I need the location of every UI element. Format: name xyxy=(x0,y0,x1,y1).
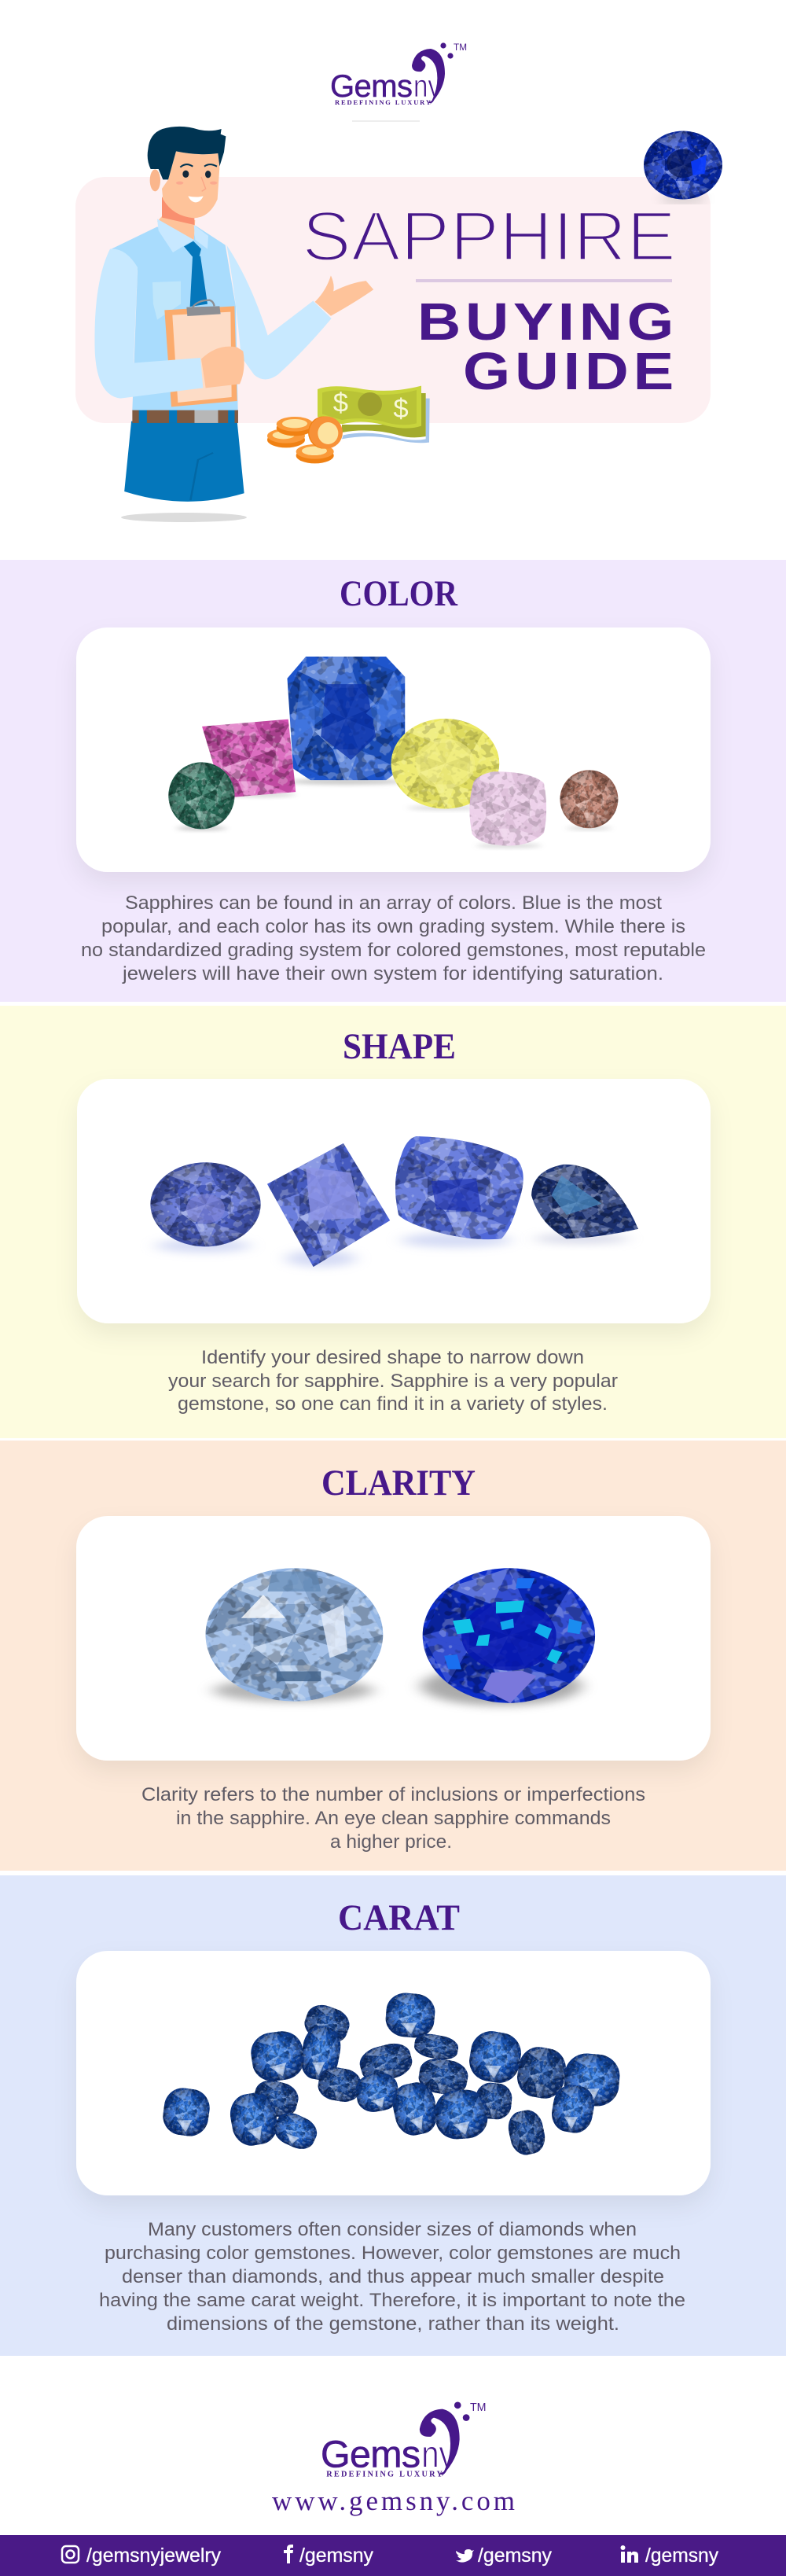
text: shape description: your search for sapphire. Sapphire is a very popular xyxy=(168,1371,618,1392)
text: carat description: Many customers often consider sizes of diamonds when xyxy=(148,2219,637,2240)
gem: deep blue oval xyxy=(413,1568,596,1711)
trousers and belt xyxy=(124,410,244,502)
text: shape description: gemstone, so one can find it in a variety of styles. xyxy=(178,1393,608,1415)
gem: light blue oval xyxy=(206,1568,384,1707)
upper body xyxy=(94,127,332,410)
website url: www.gemsny.com xyxy=(272,2486,515,2516)
handle: twitter: /gemsny xyxy=(478,2545,552,2567)
title: SAPPHIRE: SAPPHIRE xyxy=(302,197,676,275)
heading: CARAT: CARAT xyxy=(338,1897,460,1938)
title: GUIDE: GUIDE xyxy=(463,342,678,401)
logo: Gemsny top xyxy=(330,42,467,106)
text: clarity description: in the sapphire. An eye clean sapphire commands xyxy=(176,1808,611,1829)
text: color description: Sapphires can be found in an array of colors. Blue is the most xyxy=(125,892,662,914)
icon: facebook xyxy=(284,2545,293,2563)
icon: blue sapphire xyxy=(624,114,742,216)
text: clarity description: Clarity refers to the number of inclusions or imperfections xyxy=(141,1784,645,1805)
icon: linkedin xyxy=(621,2545,638,2563)
card: shape gems xyxy=(77,1079,711,1323)
icon: instagram xyxy=(62,2546,79,2563)
panel: clarity xyxy=(0,1441,786,1871)
text: color description: no standardized grading system for colored gemstones, most reputable xyxy=(81,940,706,961)
illustration: man holding clipboard xyxy=(94,127,373,522)
text: carat description: purchasing color gemstones. However, color gemstones are much xyxy=(105,2243,681,2264)
footer logo: Gemsny: TM xyxy=(470,2401,487,2414)
text: color description xyxy=(81,892,706,984)
gem: princess kite xyxy=(267,1143,390,1271)
heading: CLARITY: CLARITY xyxy=(321,1463,476,1503)
text: color description: popular, and each color has its own grading system. While there is xyxy=(101,916,685,937)
text: carat description xyxy=(99,2219,685,2335)
logo: Gemsny top: REDEFINING LUXURY xyxy=(335,98,431,106)
text: carat description: having the same carat weight. Therefore, it is important to note the xyxy=(99,2290,685,2311)
gems: pile of sapphires xyxy=(148,1979,637,2170)
card: clarity gems xyxy=(76,1516,711,1761)
heading: COLOR: COLOR xyxy=(340,573,458,614)
footer logo: Gemsny xyxy=(321,2401,487,2479)
handle: instagram: /gemsnyjewelry xyxy=(86,2545,221,2567)
pointing hand xyxy=(315,275,373,316)
text: shape description: Identify your desired shape to narrow down xyxy=(201,1347,584,1368)
gem: green oval xyxy=(152,745,252,846)
icon: money and coins xyxy=(267,386,430,463)
hero panel: pink background xyxy=(75,177,711,423)
panel: carat xyxy=(0,1875,786,2356)
text: clarity description xyxy=(141,1784,645,1853)
text: carat description: dimensions of the gemstone, rather than its weight. xyxy=(167,2313,619,2335)
text: color description: jewelers will have their own system for identifying saturation. xyxy=(122,963,663,984)
text: clarity description: a higher price. xyxy=(330,1831,452,1853)
handle: facebook: /gemsny xyxy=(299,2545,373,2567)
text: carat description: denser than diamonds, and thus appear much smaller despite xyxy=(122,2266,664,2287)
logo: Gemsny top: ny xyxy=(413,69,441,104)
gem: light pink cushion xyxy=(470,771,547,849)
footer logo: Gemsny: Gems xyxy=(321,2433,421,2475)
footer logo: Gemsny: ny xyxy=(421,2433,455,2475)
icon: money and coins: $ xyxy=(393,394,409,424)
heading: SHAPE: SHAPE xyxy=(343,1026,456,1067)
handle: linkedin: /gemsny xyxy=(645,2545,718,2567)
text: shape description xyxy=(168,1347,618,1415)
gem: pink square xyxy=(202,719,296,799)
title: BUYING: BUYING xyxy=(417,293,678,351)
footer bar: social links xyxy=(0,2535,786,2576)
gem: oval xyxy=(123,1141,288,1268)
hero section xyxy=(75,42,742,522)
logo: Gemsny top: TM xyxy=(454,42,467,53)
gem: pear xyxy=(531,1164,638,1247)
gem: yellow oval xyxy=(364,696,527,831)
footer logo: Gemsny: REDEFINING LUXURY xyxy=(326,2471,443,2479)
card: carat gems xyxy=(76,1951,711,2195)
gem: peach oval xyxy=(545,756,633,843)
gem: blue radiant xyxy=(288,657,406,786)
gem: cushion xyxy=(395,1136,523,1251)
panel: color xyxy=(0,560,786,1002)
card: color gems xyxy=(76,618,711,874)
panel: shape xyxy=(0,1006,786,1438)
icon: money and coins: $ xyxy=(333,388,348,418)
logo: Gemsny top: Gems xyxy=(330,69,413,104)
icon: twitter xyxy=(456,2549,474,2563)
